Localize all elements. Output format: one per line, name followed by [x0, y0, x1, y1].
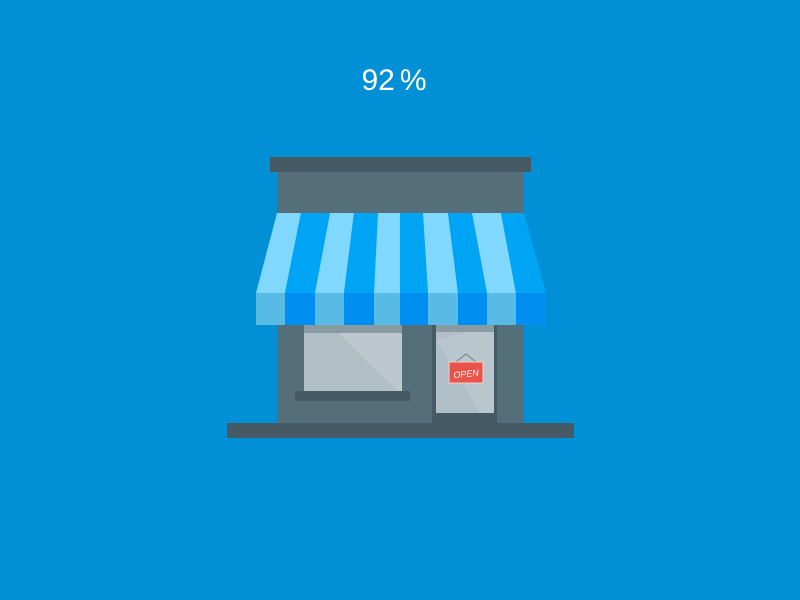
window: [295, 325, 410, 401]
sign: open: OPEN: [453, 368, 480, 380]
upper wall: [277, 172, 524, 213]
lower wall: [277, 325, 524, 423]
title: percentage: 92%: [361, 64, 427, 97]
ground base: [227, 423, 574, 438]
door: [432, 325, 497, 423]
roof cap: [270, 157, 531, 172]
awning: [256, 213, 546, 325]
